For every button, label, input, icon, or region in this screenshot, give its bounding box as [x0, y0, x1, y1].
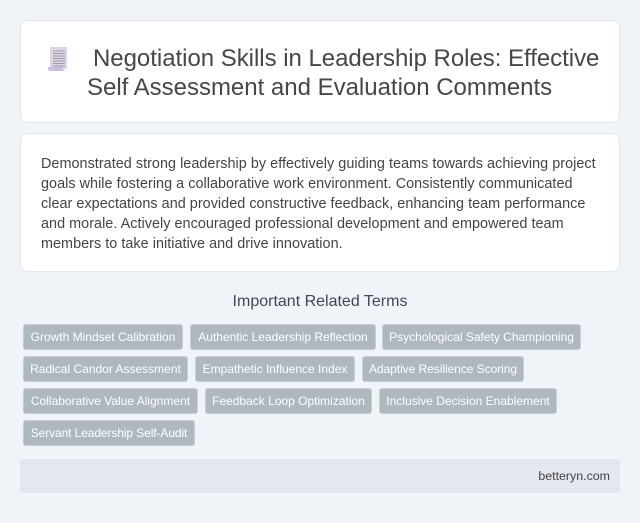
- icon: document scroll: [48, 47, 67, 71]
- tag: Psychological Safety Championing: [389, 330, 574, 344]
- footer source text: betteryn.com: [538, 469, 610, 483]
- summary paragraph: members to take initiative and drive innovation.: [41, 236, 343, 252]
- tag: [23, 324, 183, 350]
- tag: [23, 388, 198, 414]
- heading: important related terms: Important Related Terms: [233, 293, 407, 310]
- tag: Growth Mindset Calibration: [31, 330, 175, 344]
- tag: Authentic Leadership Reflection: [198, 330, 368, 344]
- summary paragraph: Demonstrated strong leadership by effectively guiding teams towards achieving project: [41, 156, 596, 172]
- footer bar: [20, 459, 620, 493]
- summary paragraph: goals while fostering a collaborative work environment. Consistently communicated: [41, 176, 573, 192]
- summary paragraph: [41, 156, 596, 252]
- title line 1: Negotiation Skills in Leadership Roles: Effective: [93, 45, 599, 72]
- summary paragraph: and morale. Actively encouraged professional development and empowered team: [41, 216, 564, 232]
- tag: [362, 356, 524, 382]
- tag: Collaborative Value Alignment: [31, 394, 190, 408]
- tag: [190, 324, 376, 350]
- tag: [23, 356, 188, 382]
- summary paragraph: clear expectations and provided constructive feedback, enhancing team performance: [41, 196, 585, 212]
- tag group: [23, 324, 581, 446]
- tag: [382, 324, 581, 350]
- tag: [23, 420, 195, 446]
- tag: Servant Leadership Self-Audit: [31, 426, 187, 440]
- tag: Empathetic Influence Index: [203, 362, 347, 376]
- tag: Radical Candor Assessment: [30, 362, 181, 376]
- panel: summary card: [20, 133, 620, 272]
- tag: Feedback Loop Optimization: [212, 394, 365, 408]
- tag: [205, 388, 372, 414]
- tag: [379, 388, 557, 414]
- panel: title card: [20, 20, 620, 123]
- tag: Adaptive Resilience Scoring: [369, 362, 517, 376]
- tag: [195, 356, 355, 382]
- tag: Inclusive Decision Enablement: [386, 394, 550, 408]
- title line 2: Self Assessment and Evaluation Comments: [87, 74, 552, 101]
